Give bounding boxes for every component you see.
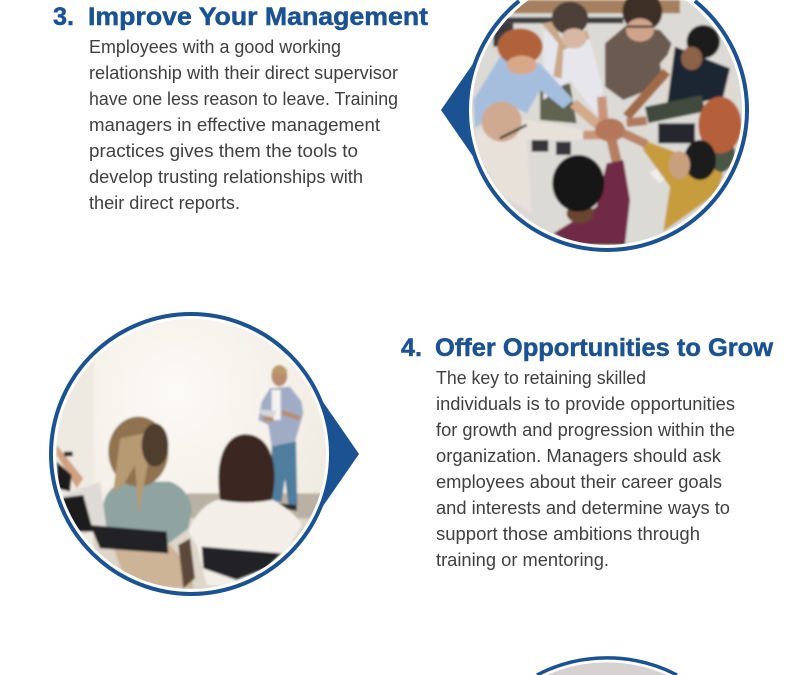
text block: step 3 body: their direct reports.: [89, 193, 240, 213]
text block: step 4 body: individuals is to provide opportunities: [436, 394, 735, 414]
text block: step 4 body: and interests and determine ways to: [436, 498, 730, 518]
heading: step 4: 4.: [401, 334, 422, 362]
text block: step 4 body: [436, 368, 735, 570]
icon: circular badge with right pointer: [50, 305, 359, 595]
heading: step 4: Offer Opportunities to Grow: [435, 334, 774, 362]
panel: step 3 improve your management: [53, 0, 747, 253]
text block: step 4 body: training or mentoring.: [436, 550, 609, 570]
text block: step 3 body: practices gives them the tools to: [89, 141, 358, 161]
panel: step 4 offer opportunities to grow: [50, 305, 774, 595]
text block: step 3 body: relationship with their direct supervisor: [89, 63, 398, 83]
text block: step 3 body: managers in effective management: [89, 115, 380, 135]
text block: step 3 body: Employees with a good working: [89, 37, 341, 57]
text block: step 4 body: for growth and progression within the: [436, 420, 735, 440]
icon: next step circular badge, cropped at page bottom: [537, 658, 677, 675]
text block: step 4 body: support those ambitions through: [436, 524, 700, 544]
photo: team joining hands in a circle: [470, 0, 747, 253]
icon: circular badge with left pointer: [441, 0, 747, 253]
heading: step 3: Improve Your Management: [88, 3, 429, 31]
text block: step 4 body: employees about their career goals: [436, 472, 722, 492]
text block: step 3 body: develop trusting relationships with: [89, 167, 363, 187]
text block: step 4 body: The key to retaining skilled: [436, 368, 646, 388]
photo: presenter speaking to seated group: [56, 319, 326, 589]
text block: step 3 body: have one less reason to leave. Training: [89, 89, 398, 109]
text block: step 4 body: organization. Managers should ask: [436, 446, 722, 466]
heading: step 3: 3.: [53, 3, 74, 31]
text block: step 3 body: [89, 37, 398, 213]
